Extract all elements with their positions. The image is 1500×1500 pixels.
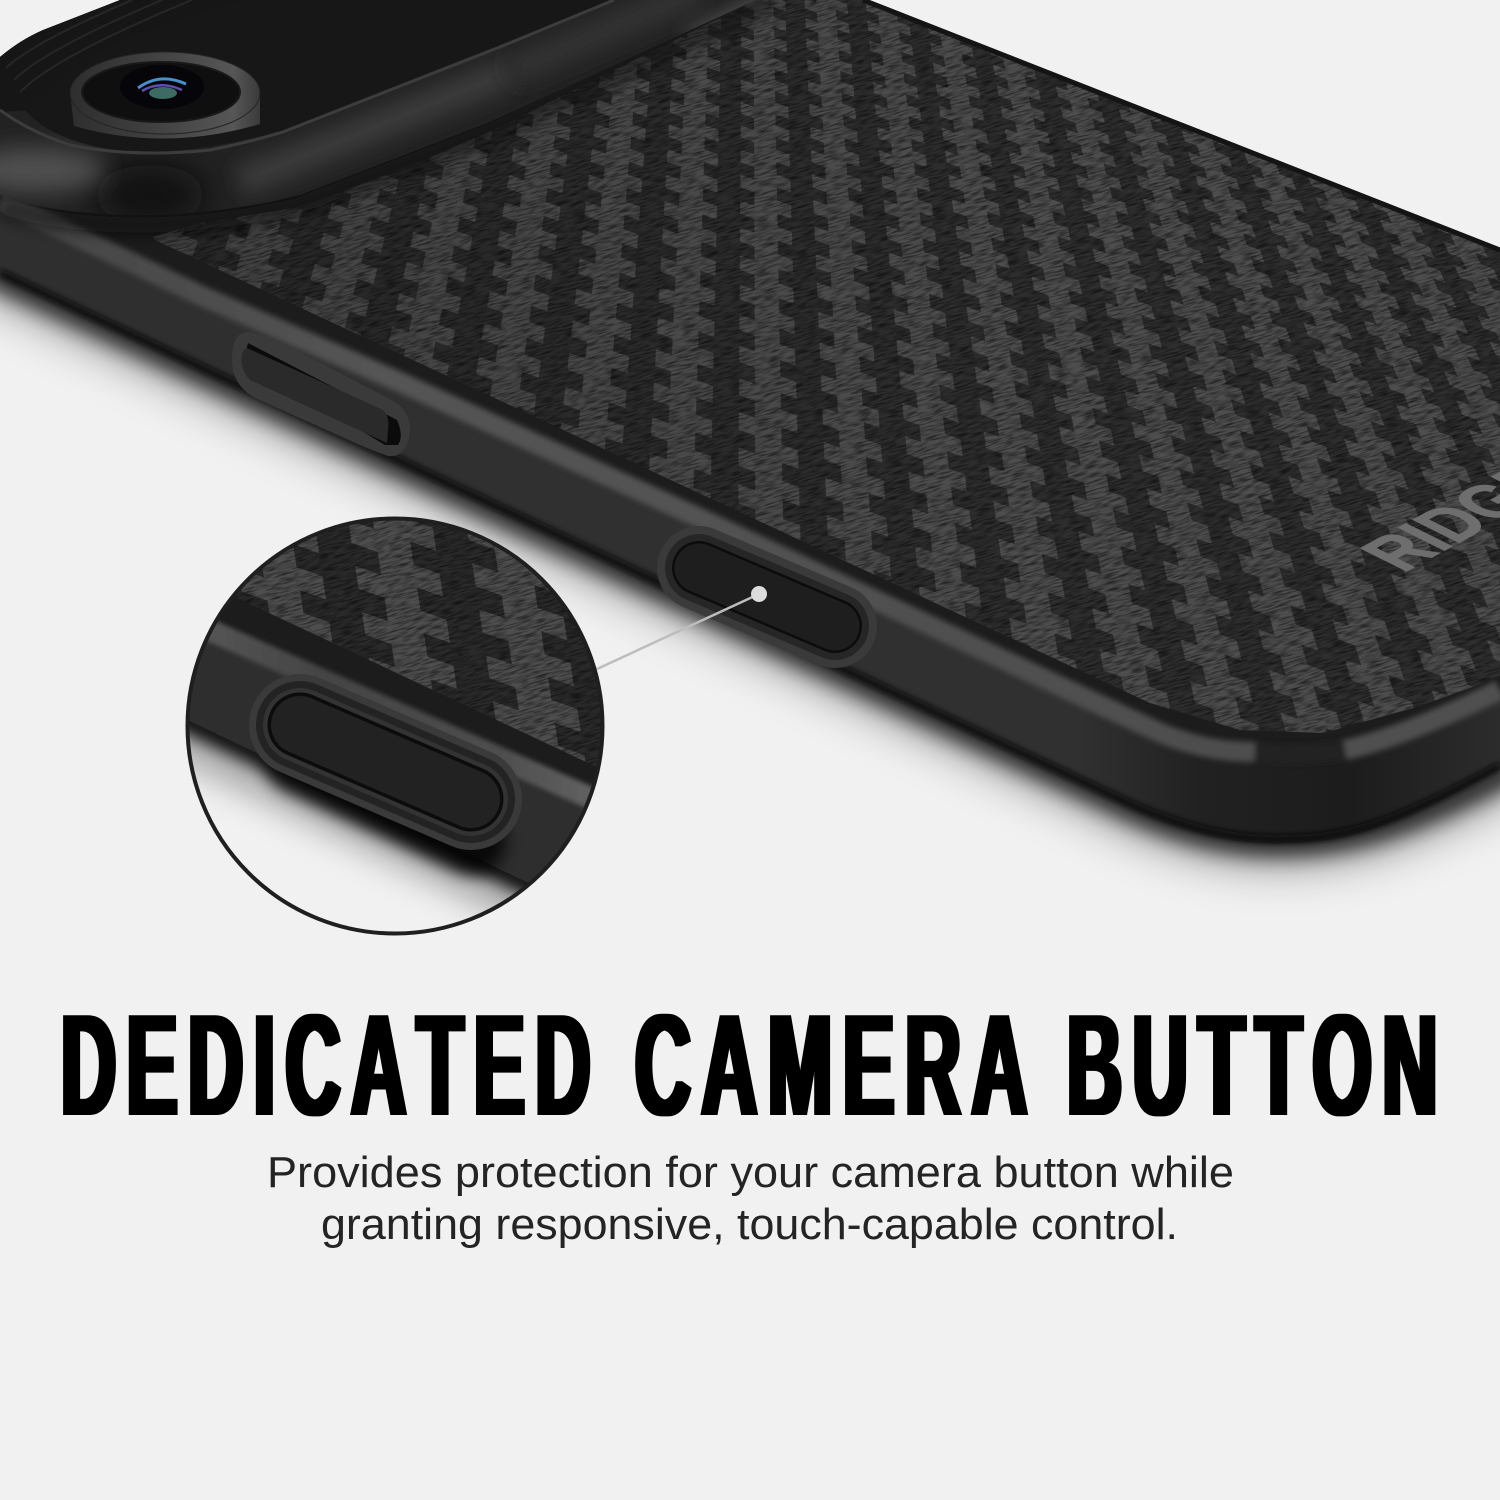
title: DEDICATED: [61, 984, 601, 1146]
zoom frame top: [218, 597, 596, 786]
button key: [699, 568, 835, 626]
lip dark center: [95, 165, 205, 225]
description text: Provides protection for your camera button while: [267, 1148, 1234, 1197]
camera button on phone: [699, 568, 835, 626]
zoom carbon weave: [236, 520, 600, 766]
ribbed corner: [0, 0, 245, 112]
zoom button shadow: [300, 760, 471, 840]
zoom button recess: [300, 725, 471, 799]
lip highlight left: [0, 148, 105, 192]
zoom button key: [300, 725, 471, 799]
lens glass: [120, 65, 204, 109]
lens housing: [70, 93, 260, 139]
carbon panel top rim: [863, 0, 1500, 250]
button outer ring: [699, 568, 835, 626]
button key: [242, 348, 388, 443]
button groove: [699, 568, 835, 626]
rib lines: [6, 0, 192, 92]
description text: granting responsive, touch-capable control.: [321, 1200, 1178, 1249]
carbon fibre back panel: [153, 0, 1500, 733]
carbon brushed texture: [154, 0, 1500, 733]
circle outline: [188, 518, 602, 934]
frame highlight band: [0, 200, 1500, 754]
phone case side wall: [0, 0, 1500, 843]
soft shadow under phone: [0, 268, 1500, 850]
zoom button: [300, 725, 471, 840]
lip highlight corner: [682, 0, 756, 34]
top side button: [232, 332, 410, 456]
description text: [267, 1148, 1234, 1249]
zoom button outer ring: [300, 725, 471, 799]
lens reflections: [138, 79, 186, 99]
lip highlight top: [510, 0, 700, 72]
lens bevel: [70, 52, 260, 134]
camera lens: [70, 52, 260, 139]
zoom shadow: [190, 720, 528, 900]
title: CAMERA: [635, 984, 1038, 1146]
zoom side wall: [190, 638, 585, 882]
callout dot: [751, 586, 767, 602]
button dark recess: [699, 568, 835, 626]
wall bottom edge: [0, 273, 1500, 839]
zoom button inner bevel: [300, 725, 471, 799]
button slot: [244, 343, 401, 445]
plate edge highlight: [0, 0, 614, 153]
recessed camera plate: [25, 0, 612, 152]
lip highlight right: [240, 72, 510, 182]
island shadow on frame: [0, 0, 770, 225]
lens face: [82, 62, 240, 122]
zoomed detail circle: [186, 516, 604, 936]
lip shading: [0, 0, 770, 225]
zoom soft shadow: [190, 726, 524, 918]
zoom button groove: [300, 725, 471, 799]
zoom highlight band: [208, 620, 592, 808]
frame top surface: [0, 0, 1500, 754]
button outer ring: [232, 332, 410, 456]
callout leader line: [597, 586, 767, 669]
camera island: [0, 0, 770, 225]
raised lip: [0, 0, 756, 215]
